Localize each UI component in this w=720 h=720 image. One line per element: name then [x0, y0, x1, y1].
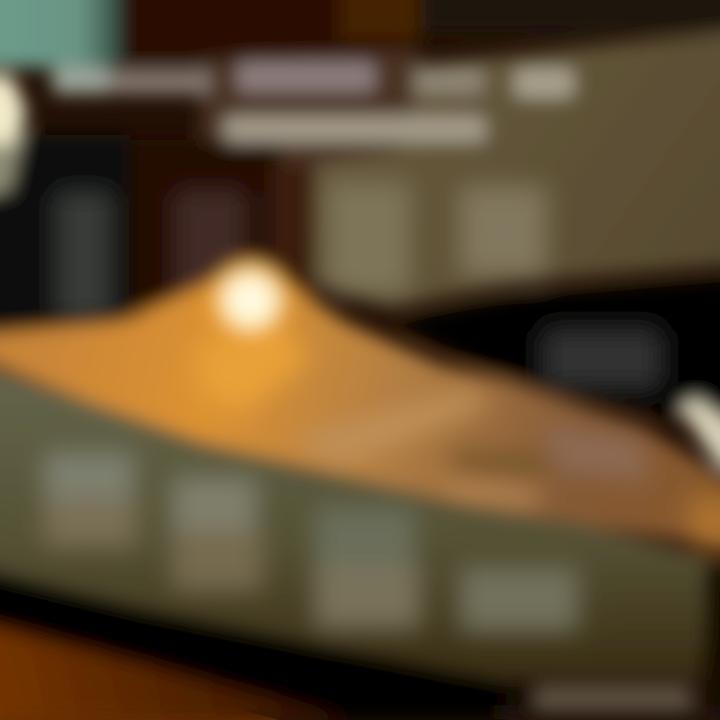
highlight, right edge: [680, 398, 720, 472]
foreground: black shadow under cabinet: [0, 565, 580, 720]
bottom edge, right: [500, 704, 720, 720]
background: teal window, top left: [0, 0, 120, 68]
title: first line, illegible in the blurred source: [52, 62, 574, 98]
background: dark brown wall, top centre: [120, 0, 720, 175]
dark strip, right edge: [704, 565, 720, 720]
dark appliance: [542, 328, 662, 390]
title: second line, illegible in the blurred source: [224, 116, 486, 142]
lower cabinet: [0, 360, 712, 680]
lower cabinet door panels: [44, 452, 578, 631]
floor underlay at the bottom edge: [0, 650, 280, 720]
dark band under upper cabinet, right: [395, 276, 720, 430]
wooden countertop: [0, 262, 720, 552]
countertop highlight streaks: [195, 325, 720, 550]
light reflection: lamp glow: [204, 254, 296, 346]
upper cabinet, right: [310, 28, 720, 308]
caption, bottom right: [535, 686, 691, 708]
cabinet door panels, upper row: [54, 182, 546, 320]
wall light, left edge: [0, 74, 28, 200]
dark cabinet, left: [0, 135, 315, 335]
foreground: orange floor: [0, 618, 350, 720]
